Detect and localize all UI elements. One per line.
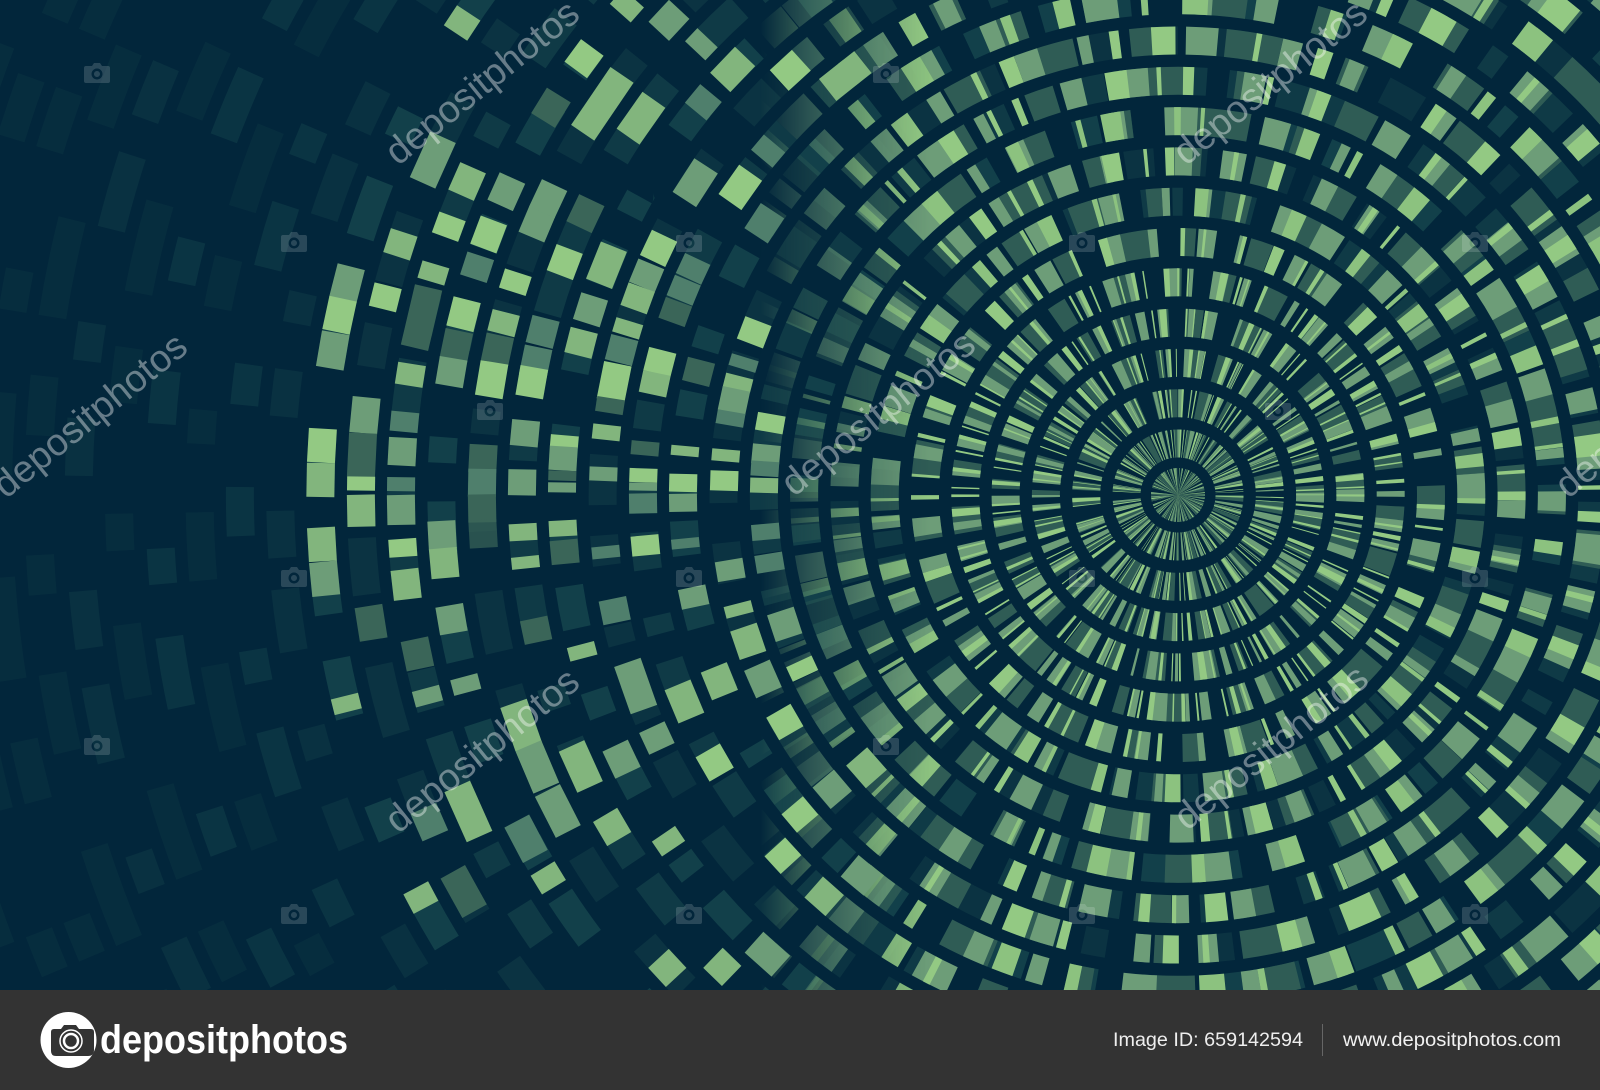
logo icon: camera in circle — [40, 1012, 96, 1068]
image id: Image ID: 659142594 — [1113, 1029, 1303, 1051]
dim inner rings — [307, 0, 1600, 990]
logo wordmark: depositphotos — [100, 1018, 348, 1062]
watermarks: depositphotos — [1166, 657, 1377, 838]
watermarks — [0, 0, 1600, 841]
bright concentric rings — [767, 0, 1600, 990]
footer bar — [0, 990, 1600, 1090]
watermarks: depositphotos — [773, 323, 984, 504]
central disc — [1159, 476, 1197, 514]
dim outer rings — [65, 0, 446, 990]
left-side blocks — [306, 0, 887, 987]
website: www.depositphotos.com — [1342, 1029, 1561, 1051]
watermarks: depositphotos — [377, 660, 588, 841]
camera watermark icons — [84, 63, 1488, 924]
